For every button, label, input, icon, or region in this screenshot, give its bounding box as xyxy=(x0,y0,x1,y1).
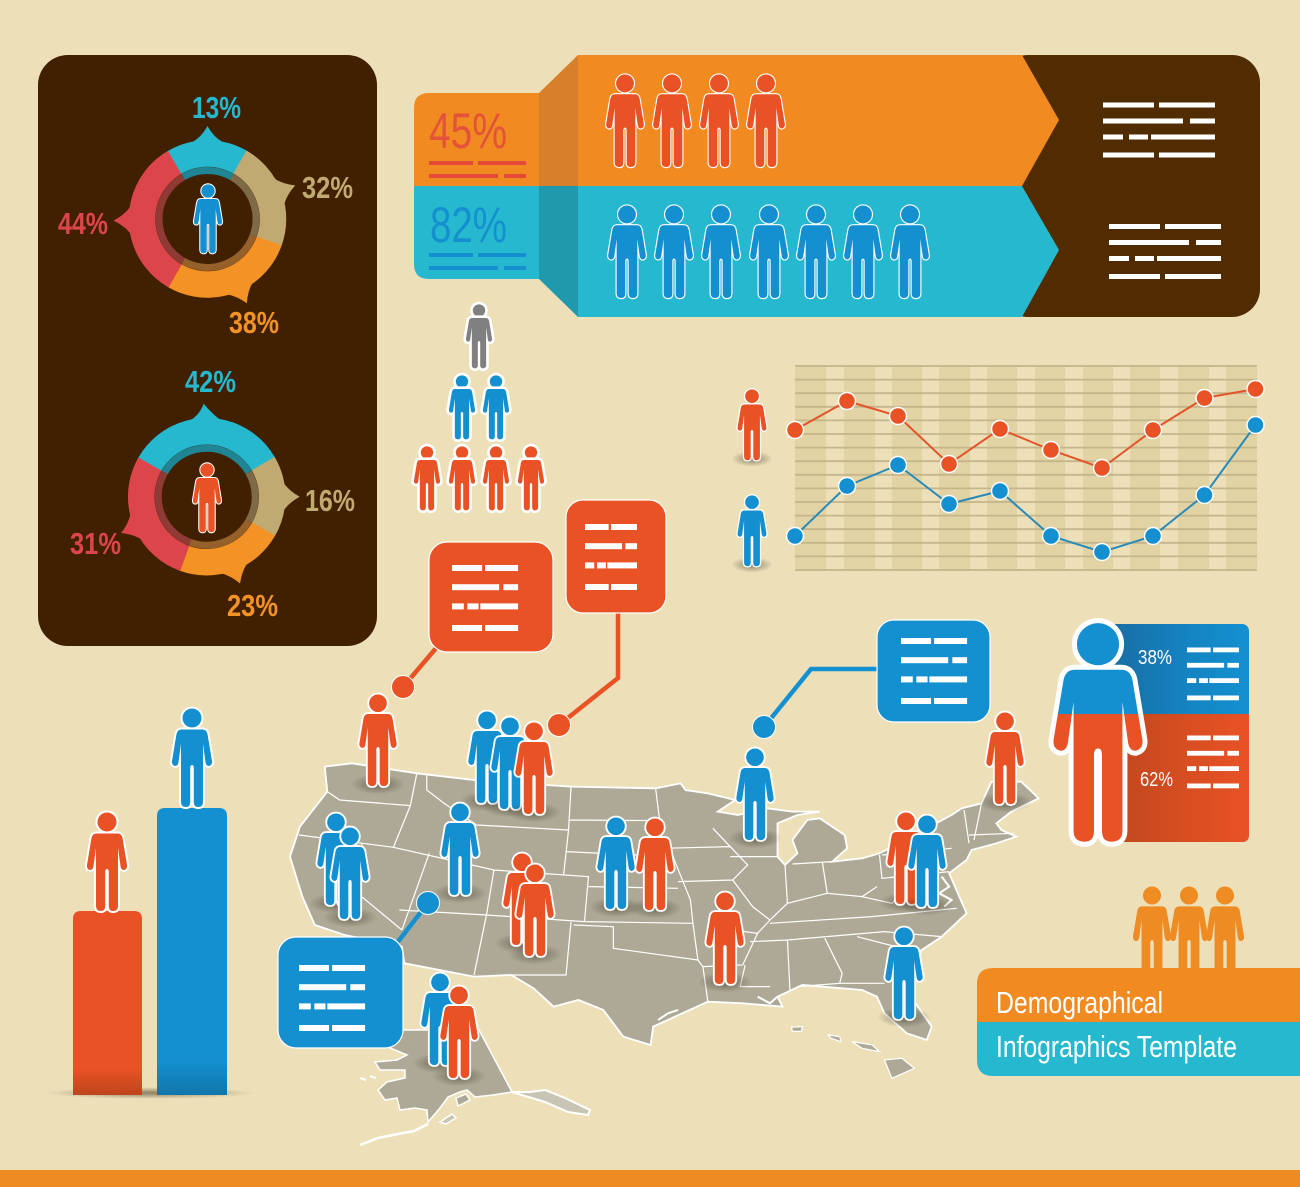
chart legend: blue person xyxy=(731,495,773,573)
label: 62%: 62% xyxy=(1140,769,1173,791)
donut chart: blue person xyxy=(113,126,301,310)
map figures xyxy=(309,694,1032,1086)
series: blue line xyxy=(786,416,1264,560)
Alaska xyxy=(360,1030,590,1145)
title line 2: Infographics Template xyxy=(996,1029,1237,1064)
panel: top comparison banner xyxy=(414,55,1260,317)
label: 16%: 16% xyxy=(305,483,355,518)
title banner xyxy=(977,968,1300,1076)
label: 38%: 38% xyxy=(229,305,279,340)
label: 42%: 42% xyxy=(185,364,236,399)
panel: gender split xyxy=(1053,623,1249,842)
series: red line xyxy=(786,380,1264,476)
label: 23%: 23% xyxy=(227,588,278,623)
label: 44%: 44% xyxy=(58,206,108,241)
label: 31%: 31% xyxy=(70,526,121,561)
text placeholder: lower xyxy=(1109,224,1221,279)
callout: red left xyxy=(392,542,553,698)
line chart xyxy=(731,365,1264,573)
stat: 82%: 82% xyxy=(430,197,507,253)
text placeholder: upper xyxy=(1103,102,1215,158)
row of four red people xyxy=(606,74,785,167)
big split person xyxy=(1053,623,1143,842)
text placeholder: upper xyxy=(1187,648,1239,700)
people pyramid xyxy=(414,304,544,510)
title line 1: Demographical xyxy=(996,985,1163,1020)
label: 13%: 13% xyxy=(192,90,241,125)
callout: blue upper xyxy=(752,620,990,738)
callout: blue lower xyxy=(278,892,440,1048)
row of seven blue people xyxy=(608,205,929,298)
contiguous states xyxy=(290,763,1039,1045)
chart legend: red person xyxy=(731,389,773,467)
donut chart: red person xyxy=(115,404,300,589)
text placeholder: lower xyxy=(1187,736,1239,788)
label: 32%: 32% xyxy=(302,170,353,205)
bar chart with people xyxy=(45,708,255,1099)
three orange people xyxy=(1133,886,1244,980)
Hawaii xyxy=(791,1027,914,1078)
bottom orange strip xyxy=(0,1170,1300,1187)
label: 38%: 38% xyxy=(1138,647,1172,669)
stat: 45%: 45% xyxy=(429,103,507,159)
map of the United States xyxy=(290,694,1039,1145)
callout: red right xyxy=(548,500,666,736)
panel: donut charts xyxy=(38,55,377,646)
